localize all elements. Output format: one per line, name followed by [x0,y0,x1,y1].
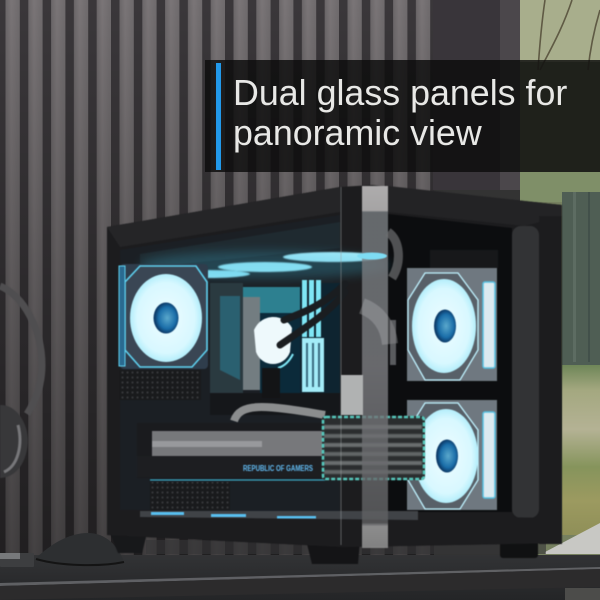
right fan bottom [407,400,497,510]
top panel [107,187,340,247]
case body shell [107,185,562,547]
wall reflection between case feet [146,540,546,554]
top fan glow strips [162,252,383,278]
RAM sticks [302,280,324,392]
bottom frame [107,512,562,547]
keyboard edge [0,553,34,567]
background: dark wall section [433,0,520,190]
left interior [120,215,340,512]
left fan [119,264,208,369]
graphics card heatsink behind glass [322,416,425,480]
accent bar [216,63,221,170]
background: window with greenery [520,0,600,560]
mesh vents under left fan [119,370,230,510]
heading: Dual glass panels for [233,73,567,113]
right fan top [407,268,497,381]
caption panel [205,60,600,172]
PSU cables [234,407,325,421]
PC case [107,185,562,564]
right radiator mesh [430,250,498,268]
right interior [388,214,512,512]
left interior top bracket [140,222,340,268]
graphics card [137,423,327,480]
desk surface [0,555,600,600]
computer mouse [36,533,124,565]
radiator tubes [280,284,345,345]
heading: panoramic view [233,113,482,153]
bottom shelf glow strips [140,511,418,520]
CPU cooler pump [254,317,293,398]
background: slatted wall [0,0,434,566]
case feet [110,533,538,564]
motherboard panel [210,283,340,415]
riser glow line [150,479,325,481]
right side curved glass edge [512,226,539,518]
glass corner pillar [341,186,398,548]
headphones [0,286,42,478]
card logo text: REPUBLIC OF GAMERS [243,463,313,473]
